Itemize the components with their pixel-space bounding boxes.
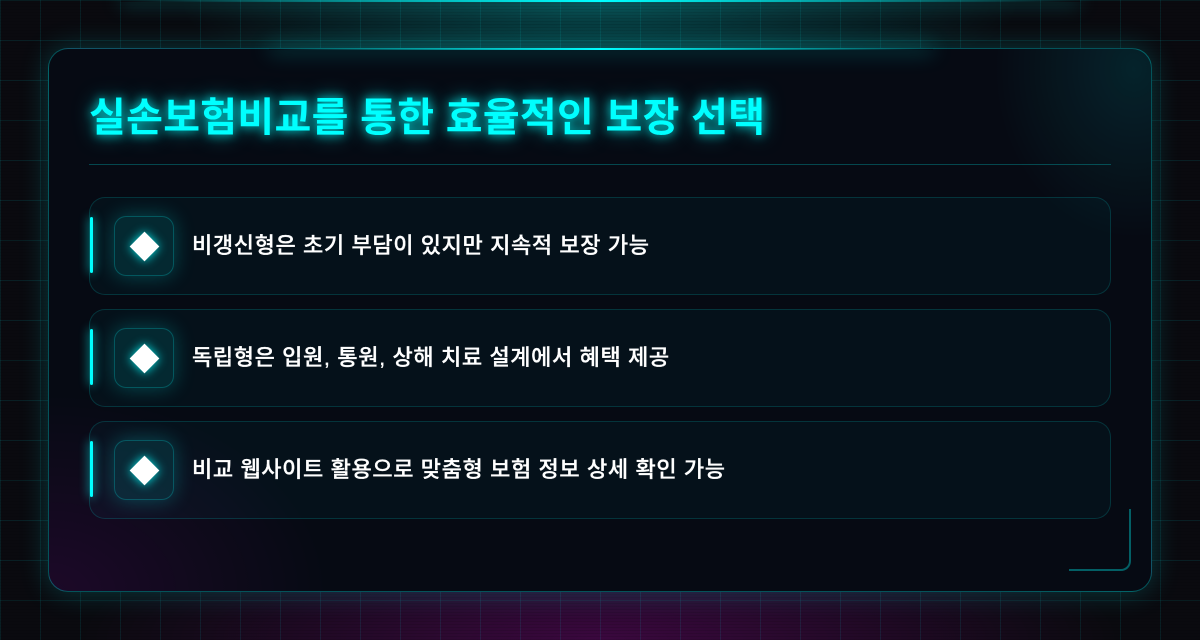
icon: diamond [114,216,174,276]
card top glow bar [269,48,933,50]
list item 2 [89,309,1111,407]
title: 실손보험비교를 통한 효율적인 보장 선택 [89,96,765,140]
item text 3: 비교 웹사이트 활용으로 맞춤형 보험 정보 상세 확인 가능 [192,457,726,482]
item text 1: 비갱신형은 초기 부담이 있지만 지속적 보장 가능 [192,233,650,258]
top glow bar [120,0,1080,2]
list item 3 [89,421,1111,519]
panel: main card [48,48,1152,592]
icon: diamond [114,440,174,500]
corner bracket [1069,509,1131,571]
item text 2: 독립형은 입원, 통원, 상해 치료 설계에서 혜택 제공 [192,345,670,370]
list item 1 [89,197,1111,295]
icon: diamond [114,328,174,388]
